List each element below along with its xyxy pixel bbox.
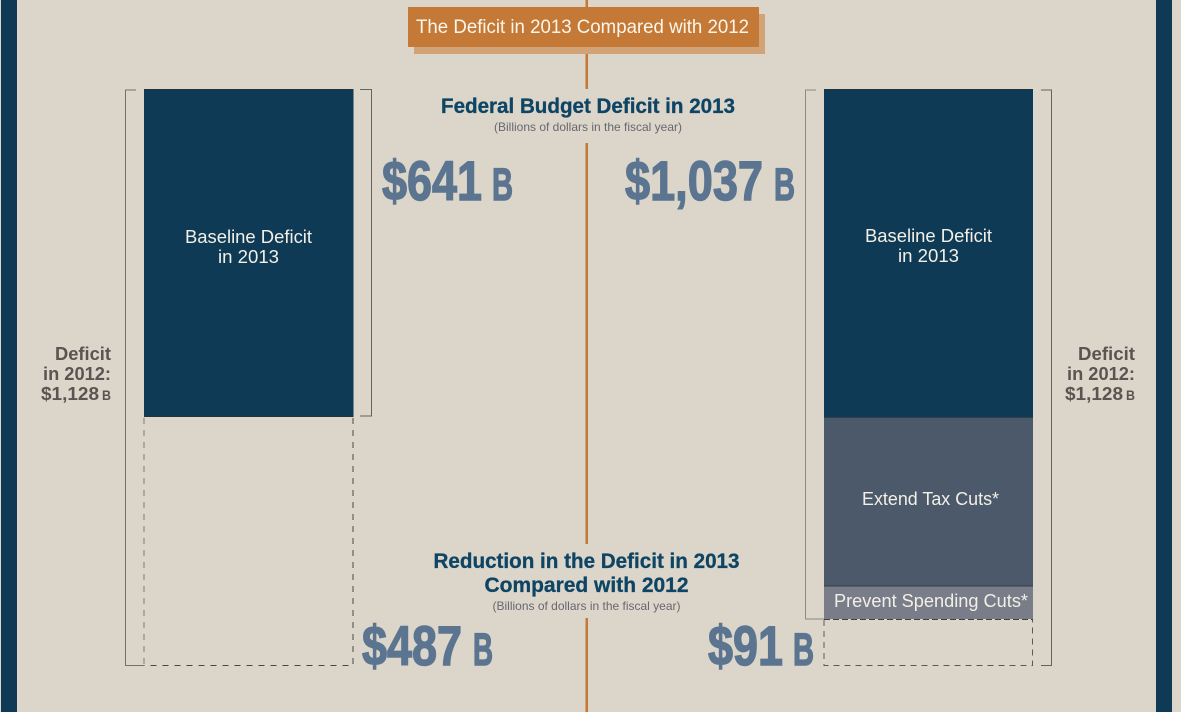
heading: federal budget deficit (441, 95, 735, 134)
left label: deficit in 2012: B (102, 387, 111, 403)
left border bar (1, 0, 17, 712)
heading: reduction in the deficit: (Billions of dollars in the fiscal year) (492, 599, 680, 613)
heading: reduction in the deficit: Compared with 2012 (484, 574, 688, 597)
left inner bracket (360, 90, 372, 416)
left label: deficit in 2012: Deficit (55, 343, 111, 364)
title banner: The Deficit in 2013 Compared with 2012 (416, 16, 749, 38)
value: 487 billion: $487 (362, 614, 462, 677)
value: 91 billion: B (793, 624, 814, 675)
right chart: 2013 deficit without policy changes (806, 89, 1052, 666)
extend tax cuts bar: Extend Tax Cuts* (862, 488, 999, 509)
right label: deficit in 2012: in 2012: (1067, 363, 1135, 384)
prevent spending cuts bar (824, 586, 1033, 620)
right label: deficit in 2012 (1065, 343, 1135, 404)
right baseline deficit bar: Baseline Deficit (865, 225, 992, 246)
right border bar (1156, 0, 1172, 712)
value: 1,037 billion: $1,037 (625, 149, 763, 212)
value: 487 billion: B (473, 624, 493, 675)
left label: deficit in 2012: $1,128 (41, 383, 99, 404)
left outer bracket (126, 90, 144, 666)
heading: federal budget deficit: (Billions of dollars in the fiscal year) (494, 120, 682, 134)
value: 641 billion: $641 (382, 149, 482, 212)
left baseline deficit bar: Baseline Deficit (185, 226, 312, 247)
left label: deficit in 2012: in 2012: (43, 363, 111, 384)
right dashed reduction box (824, 620, 1032, 666)
left baseline deficit bar (144, 89, 354, 417)
right label: deficit in 2012: B (1126, 387, 1135, 403)
right label: deficit in 2012: Deficit (1078, 343, 1135, 364)
value: 91 billion: $91 (708, 614, 783, 677)
heading: reduction in the deficit (434, 550, 740, 613)
heading: reduction in the deficit: Reduction in the Deficit in 2013 (434, 550, 740, 573)
value: 641 billion: B (492, 159, 513, 210)
left label: deficit in 2012 (41, 343, 111, 404)
right label: deficit in 2012: $1,128 (1065, 383, 1123, 404)
right baseline deficit bar (824, 89, 1033, 417)
value: 1,037 billion: B (774, 159, 795, 210)
left dashed reduction box (144, 418, 353, 666)
center divider line (586, 0, 588, 712)
left baseline deficit bar: in 2013 (218, 246, 279, 267)
extend tax cuts bar (824, 417, 1033, 586)
right outer bracket right side (1041, 90, 1052, 666)
heading: federal budget deficit: Federal Budget Deficit in 2013 (441, 95, 735, 118)
right outer bracket left side (806, 90, 824, 619)
title banner (408, 7, 765, 54)
right baseline deficit bar: in 2013 (898, 245, 959, 266)
prevent spending cuts bar: Prevent Spending Cuts* (834, 590, 1028, 611)
left chart: 2013 deficit with policy changes (126, 89, 372, 666)
